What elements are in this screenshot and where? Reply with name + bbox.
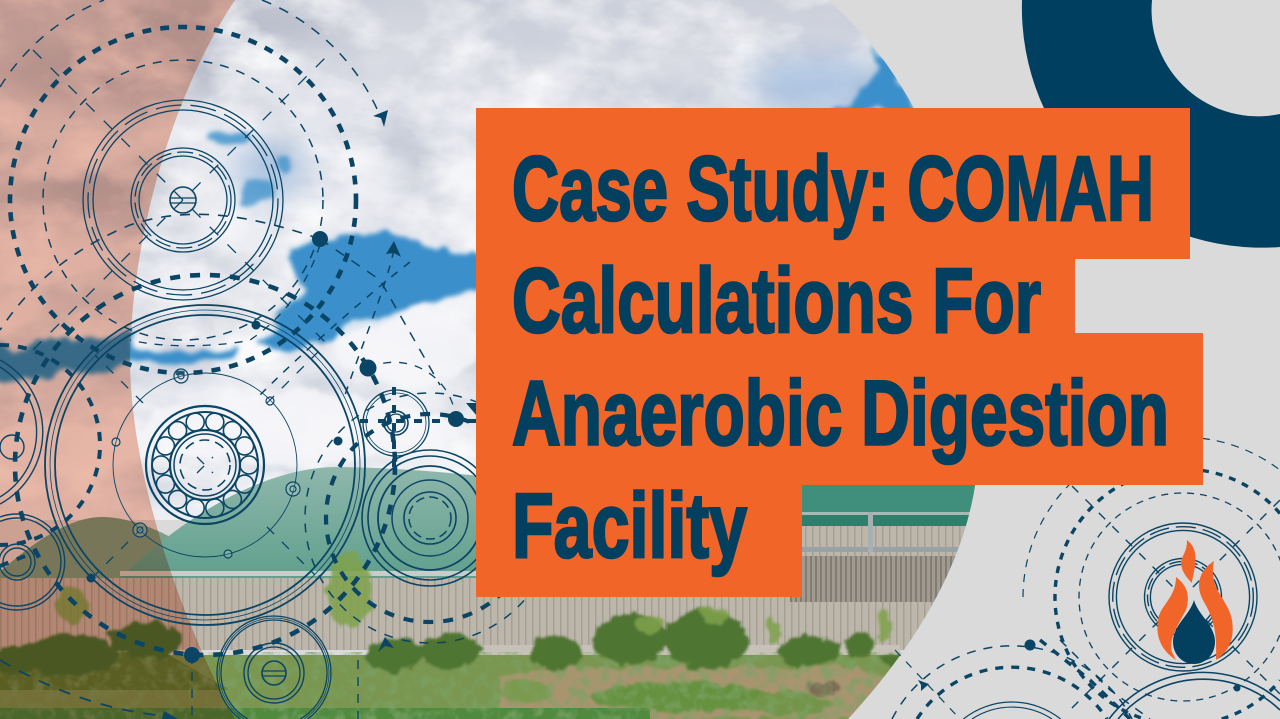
orange title panel [476,108,1203,597]
node dots [86,231,1240,692]
medium right gear [305,393,555,643]
storage domes [0,467,976,578]
navy ring top right [1022,0,1280,248]
bottom-right concentric gear [1023,437,1280,719]
small right gear [360,362,476,473]
sky and clouds [0,0,1000,520]
title text: Facility [512,475,747,577]
ground and shrubs [0,552,1000,719]
title text: Calculations For [512,250,1041,352]
bottom gear [217,616,331,719]
left edge gears [0,345,100,610]
dashed connector arcs [0,214,440,719]
photo: biogas facility under cloudy sky [0,0,1000,719]
pink tinted overlay [0,0,240,719]
bottom-right lower bearing and arcs [892,640,1280,719]
arrowheads [162,110,929,719]
concrete and timber wall [0,512,1000,657]
large bearing diagram [15,275,395,655]
top-left concentric gear [0,0,381,373]
logo: flames and drop [1157,540,1233,664]
title text [512,138,1169,577]
